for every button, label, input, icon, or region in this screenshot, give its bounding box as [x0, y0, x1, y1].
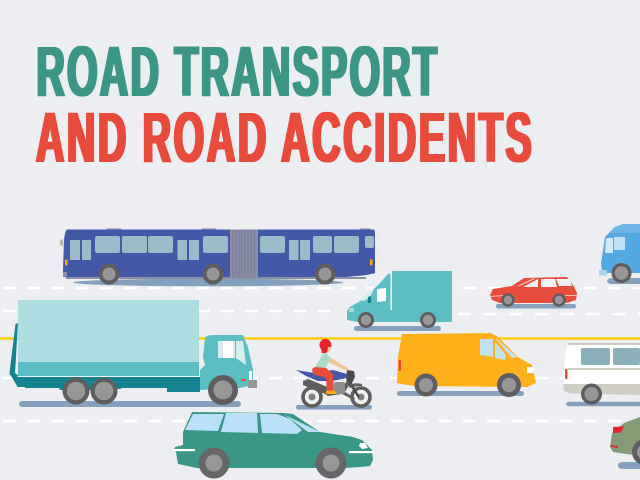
icon: articulated blue bus — [60, 228, 375, 286]
icon: olive car at right edge — [610, 417, 640, 469]
title: and road accidents: AND ROAD ACCIDENTS — [36, 99, 532, 178]
icon: teal delivery truck — [347, 271, 452, 331]
icon: large box truck — [10, 300, 257, 407]
title: road transport: ROAD TRANSPORT — [36, 33, 437, 112]
icon: orange van — [397, 333, 536, 397]
icon: motorcyclist — [296, 339, 372, 410]
icon: white minibus — [563, 343, 640, 406]
icon: blue truck at right edge — [599, 224, 640, 284]
icon: red estate car — [490, 277, 577, 308]
icon: green estate car — [174, 412, 373, 478]
